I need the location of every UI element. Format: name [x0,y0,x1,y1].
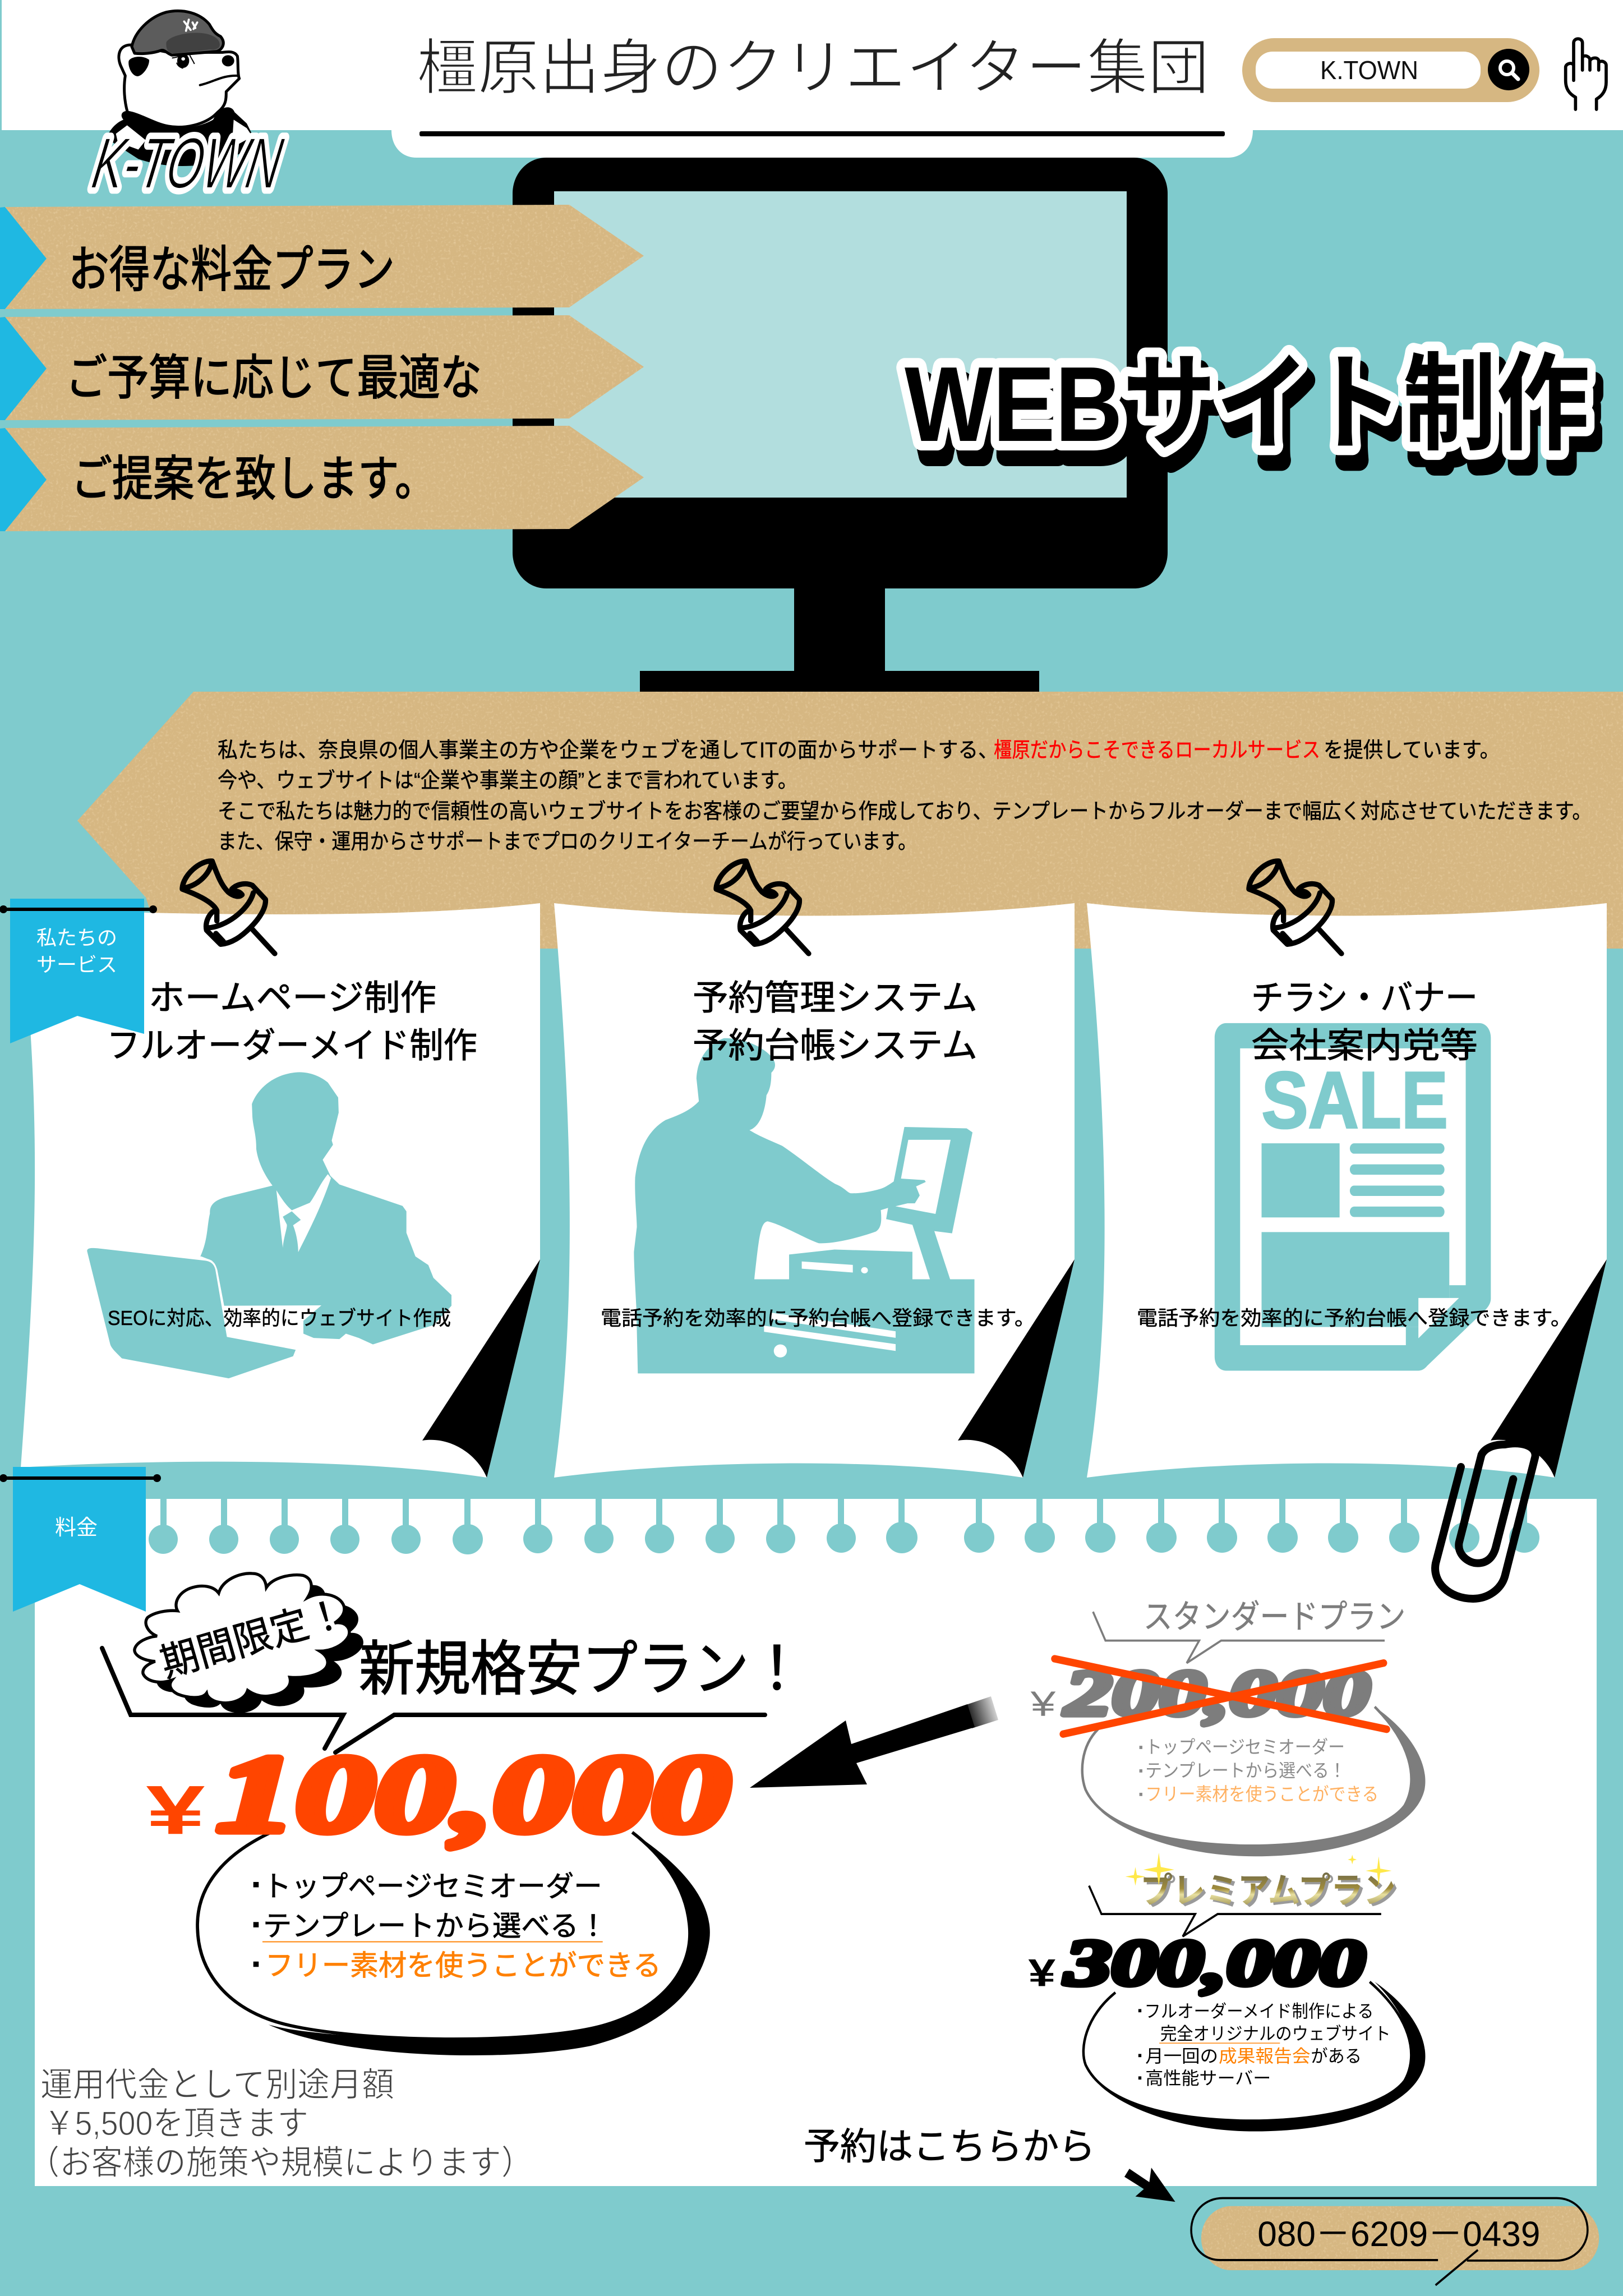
speech line [1089,1886,1381,1936]
panel: premium plan [1028,1853,1425,2132]
note line 3: （お客様の施策や規模によります） [28,2144,533,2182]
logo wordmark: K-TOWN [87,123,288,204]
new plan details [146,1734,730,2055]
bullet 2: テンプレートから選べる！ [1145,1760,1346,1781]
icon: magnifier [1488,49,1529,90]
yen sign: ¥ [146,1772,205,1849]
phone number: 080－6209－0439 [1257,2214,1540,2254]
bullet 3: 高性能サーバー [1145,2069,1271,2088]
bullet 2 end: がある [1311,2046,1362,2066]
flyer word: SALE [1262,1055,1448,1145]
yen sign: ¥ [1030,1684,1056,1723]
intro highlight: 橿原だからこそできるローカルサービス [994,739,1320,762]
bear head [119,45,239,127]
header underline [419,131,1225,136]
icon: pushpin 3 [1249,861,1341,954]
old price: 200,000 [1063,1658,1370,1729]
card 2 title line 2: 予約台帳システム [693,1027,978,1065]
ribbon label: 料金 [55,1516,98,1540]
bullet 1: トップページセミオーダー [1145,1737,1345,1757]
yen sign: ¥ [1028,1952,1055,1995]
icon: pushpin 2 [716,861,809,954]
logo: K-TOWN bear [87,11,288,204]
page fold [958,1259,1075,1478]
panel: pricing sheet [35,1499,1597,2186]
bullet 3: フリー素材を使うことができる [265,1949,661,1982]
ribbon arrow 2 [0,315,644,420]
bullet 1: フルオーダーメイド制作による [1145,2001,1373,2021]
header white band [2,0,1623,158]
price: 100,000 [217,1734,730,1855]
bullet 1 continuation: 完全オリジナルのウェブサイト [1160,2024,1391,2044]
panel: standard plan [1030,1599,1425,1856]
bear cap [132,11,223,55]
bullet 2 highlight: 成果報告会 [1219,2046,1311,2066]
section ribbon: pricing [0,1467,161,1612]
bear hoodie [107,107,253,166]
note line 1: 運用代金として別途月額 [40,2066,394,2104]
speech bubble [197,1832,710,2055]
premium heading shadow: プレミアムプラン [1144,1873,1399,1912]
icon: operator at terminal [634,1038,975,1373]
page fold [422,1259,540,1478]
ribbon text 1: お得な料金プラン [68,242,395,297]
icon: pushpin 1 [182,861,275,954]
speech bubble [1082,1707,1425,1856]
panel: service card 3 [1087,903,1607,1478]
card 2 description: 電話予約を効率的に予約台帳へ登録できます。 [601,1306,1035,1329]
speech bubble [1083,1982,1425,2132]
bullet 2: テンプレートから選べる！ [263,1910,607,1942]
cloud text: 期間限定！ [156,1591,350,1685]
panel: service card 2 [554,903,1075,1478]
intro line 2: 今や、ウェブサイトは“企業や事業主の顔”とまで言われています。 [218,769,797,793]
premium price: 300,000 [1064,1927,1365,1999]
card 3 description: 電話予約を効率的に予約台帳へ登録できます。 [1137,1306,1571,1329]
icon: paperclip [1435,1443,1536,1599]
section ribbon: services [0,899,157,1043]
icon: businessman with laptop [87,1072,451,1378]
standard heading: スタンダードプラン [1144,1599,1405,1636]
ribbon label line 2: サービス [36,953,117,976]
card 1 title line 2: フルオーダーメイド制作 [107,1027,477,1065]
new plan heading: 新規格安プラン！ [359,1636,805,1703]
intro banner [77,692,1623,949]
page fold [1491,1259,1607,1478]
logo wordmark outline: K-TOWN [87,123,288,204]
phone badge [1191,2198,1599,2285]
small arrow [1124,2168,1175,2202]
ribbon arrow 3 [0,426,644,531]
card 3 title line 1: チラシ・バナー [1251,979,1478,1018]
title: 橿原出身のクリエイター集団 [417,34,1209,102]
card 1 description: SEOに対応、効率的にウェブサイト作成 [108,1306,451,1329]
monthly fee note [28,2066,533,2182]
premium heading: プレミアムプラン [1140,1871,1396,1911]
intro line 1 end: を提供しています。 [1324,739,1500,762]
icon: pointing hand [1566,39,1606,109]
ribbon text 3: ご提案を致します。 [71,452,436,506]
note line 2: ￥5,500を頂きます [44,2105,308,2142]
card 3 title line 2: 会社案内党等 [1251,1027,1478,1065]
card 2 title line 1: 予約管理システム [693,979,978,1018]
search box [1242,38,1539,102]
icon: sale flyer [1215,1023,1491,1370]
search box label: K.TOWN [1320,56,1418,85]
reservation prompt: 予約はこちらから [804,2125,1095,2167]
new plan speech line [102,1648,765,1752]
sparkles [1126,1853,1391,1886]
monitor illustration [513,158,1168,692]
ribbon label line 1: 私たちの [36,926,117,949]
bullet 1: トップページセミオーダー [263,1870,602,1903]
notebook holes [149,1499,1539,1554]
big arrow [750,1696,998,1788]
speech line [1093,1612,1385,1663]
strike-through cross [1054,1659,1387,1734]
intro line 4: また、保守・運用からさサポートまでプロのクリエイターチームが行っています。 [218,830,917,854]
card 1 title line 1: ホームページ制作 [149,979,436,1018]
intro line 1: 私たちは、奈良県の個人事業主の方や企業をウェブを通してITの面からサポートする、 [218,739,998,762]
ribbon text 2: ご予算に応じて最適な [66,351,482,405]
bullet 3: フリー素材を使うことができる [1145,1784,1378,1805]
panel: service card 1 [21,903,540,1478]
limited-time cloud [135,1573,363,1713]
ribbon arrow 1 [0,205,644,309]
bullet 2: 月一回の [1145,2046,1218,2066]
